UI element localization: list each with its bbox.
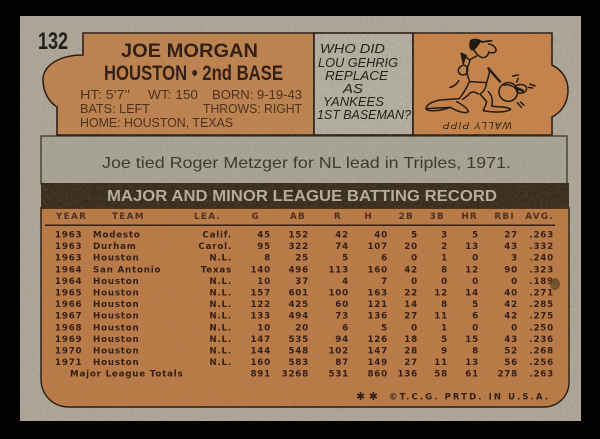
table row 1964 Houston: Houston — [93, 277, 140, 287]
table row 1965 Houston: 163 — [367, 288, 388, 298]
table row major league totals: 3268 — [282, 370, 309, 380]
table row 1963 Houston: 8 — [264, 254, 271, 264]
table row 1970 Houston: 28 — [404, 346, 418, 356]
table row 1966 Houston: 42 — [504, 300, 518, 310]
table header: RBI — [494, 212, 515, 222]
table row 1969 Houston: .236 — [529, 335, 554, 345]
table row 1966 Houston: 60 — [335, 300, 349, 310]
table row 1971 Houston: 11 — [434, 358, 448, 368]
table row 1966 Houston: 5 — [472, 300, 479, 310]
table row 1963 Modesto: 42 — [335, 230, 349, 240]
table header: 2B — [399, 212, 414, 222]
table row 1963 Durham: 107 — [367, 242, 388, 252]
table row 1967 Houston: 1967 — [55, 312, 82, 322]
table row 1963 Modesto: 3 — [441, 230, 448, 240]
table row 1970 Houston: 8 — [472, 346, 479, 356]
table row 1971 Houston: 583 — [288, 358, 309, 368]
table row 1968 Houston: 0 — [472, 323, 479, 333]
table row 1969 Houston: Houston — [93, 335, 140, 345]
table row 1970 Houston: 52 — [504, 346, 518, 356]
table row 1969 Houston: 18 — [404, 335, 418, 345]
stain mark — [550, 278, 560, 290]
table row 1971 Houston: 160 — [250, 358, 271, 368]
bio lines: HT: 5'7'' — [80, 87, 130, 102]
table row 1963 Durham: 1963 — [55, 242, 82, 252]
panel: trivia question: 1ST BASEMAN? — [317, 108, 411, 122]
table row 1971 Houston: N.L. — [209, 358, 232, 368]
table row 1971 Houston: 1971 — [55, 358, 82, 368]
panel: trivia question — [314, 33, 413, 135]
table row 1963 Houston: 3 — [511, 254, 518, 264]
table row 1963 Durham: 43 — [504, 242, 518, 252]
table row 1971 Houston: 87 — [335, 358, 349, 368]
table row 1963 Houston — [55, 254, 554, 264]
table row 1970 Houston: .268 — [529, 346, 554, 356]
table row 1964 Houston: 0 — [511, 277, 518, 287]
table row 1963 Modesto: 45 — [257, 230, 271, 240]
panel: cartoon answer — [413, 33, 568, 135]
table header: 3B — [430, 212, 445, 222]
table row 1964 Houston: .189 — [529, 277, 554, 287]
table row 1963 Durham: Carol. — [198, 242, 232, 252]
table row 1964 Houston: 0 — [472, 277, 479, 287]
table row 1971 Houston: 27 — [404, 358, 418, 368]
table row major league totals: .263 — [529, 370, 554, 380]
table row 1963 Houston: 6 — [381, 254, 388, 264]
table row major league totals: 891 — [250, 370, 271, 380]
table row 1964 San Antonio: 496 — [288, 265, 309, 275]
table row 1963 Durham: 2 — [441, 242, 448, 252]
card number: 132 — [38, 28, 68, 55]
table row 1964 San Antonio: 90 — [504, 265, 518, 275]
bio lines: BORN: 9-19-43 — [212, 87, 302, 102]
table row 1965 Houston: 1965 — [55, 288, 82, 298]
panel: batting record table — [41, 183, 569, 407]
table row 1969 Houston: 1969 — [55, 335, 82, 345]
table row 1963 Durham: Durham — [93, 242, 137, 252]
table row 1963 Modesto: 1963 — [55, 230, 82, 240]
table row 1965 Houston: .271 — [529, 288, 554, 298]
cartoon answer: upside-down caption: WALLY PIPP — [443, 119, 512, 130]
table row 1965 Houston: 100 — [328, 288, 349, 298]
table header: R — [334, 212, 342, 222]
table row 1963 Houston: 1 — [441, 254, 448, 264]
table header: H — [364, 212, 373, 222]
table row 1964 Houston: 10 — [257, 277, 271, 287]
table row 1971 Houston: .256 — [529, 358, 554, 368]
panel: trivia question: LOU GEHRIG — [318, 56, 398, 70]
table row major league totals: 531 — [328, 370, 349, 380]
table row 1966 Houston: 121 — [367, 300, 388, 310]
table row 1965 Houston: Houston — [93, 288, 140, 298]
table row 1963 Houston: 0 — [472, 254, 479, 264]
table row 1963 Modesto: 27 — [504, 230, 518, 240]
table row major league totals: 278 — [497, 370, 518, 380]
table row 1964 San Antonio: Texas — [201, 265, 232, 275]
table row 1970 Houston: 144 — [250, 346, 271, 356]
bio lines: WT: 150 — [148, 87, 198, 102]
table row 1969 Houston — [55, 335, 554, 345]
table row 1965 Houston: 22 — [404, 288, 418, 298]
table row 1968 Houston: 5 — [381, 323, 388, 333]
table row 1971 Houston: Houston — [93, 358, 140, 368]
table row 1965 Houston: 601 — [288, 288, 309, 298]
table row 1967 Houston: 27 — [404, 312, 418, 322]
table header: AVG. — [525, 212, 554, 222]
bio lines — [80, 87, 302, 130]
table row 1968 Houston: 1968 — [55, 323, 82, 333]
table row 1970 Houston: N.L. — [209, 346, 232, 356]
table row 1968 Houston: Houston — [93, 323, 140, 333]
table row 1966 Houston: 1966 — [55, 300, 82, 310]
table row 1964 Houston — [55, 277, 554, 287]
table row 1963 Houston: 25 — [295, 254, 309, 264]
bio lines: THROWS: RIGHT — [203, 101, 302, 116]
table row 1969 Houston: 535 — [288, 335, 309, 345]
panel: trivia question: REPLACE — [325, 69, 389, 83]
table row 1963 Modesto: .263 — [529, 230, 554, 240]
table row 1970 Houston — [55, 346, 554, 356]
table row 1964 San Antonio: 140 — [250, 265, 271, 275]
table row 1966 Houston: 8 — [441, 300, 448, 310]
table header: LEA. — [194, 212, 221, 222]
panel: trivia question: WHO DID — [320, 42, 385, 56]
table row 1966 Houston — [55, 300, 554, 310]
table row 1963 Durham: 322 — [288, 242, 309, 252]
table row 1963 Houston: N.L. — [209, 254, 232, 264]
table row 1963 Modesto: 40 — [374, 230, 388, 240]
table row 1970 Houston: 1970 — [55, 346, 82, 356]
table row 1969 Houston: 5 — [441, 335, 448, 345]
table header — [55, 212, 554, 222]
table row 1969 Houston: 15 — [465, 335, 479, 345]
table row 1963 Modesto: Calif. — [202, 230, 232, 240]
table row 1969 Houston: 147 — [250, 335, 271, 345]
table row 1967 Houston: 42 — [504, 312, 518, 322]
table row 1969 Houston: 94 — [335, 335, 349, 345]
team and position: HOUSTON • 2nd BASE — [104, 62, 283, 85]
panel: career highlight — [41, 136, 567, 184]
table row 1966 Houston: 425 — [288, 300, 309, 310]
table row 1963 Houston: Houston — [93, 254, 140, 264]
panel: player name and bio — [38, 28, 314, 135]
table row 1970 Houston: 548 — [288, 346, 309, 356]
table row 1967 Houston: 11 — [434, 312, 448, 322]
table row 1964 Houston: 37 — [295, 277, 309, 287]
table row 1968 Houston: .250 — [529, 323, 554, 333]
table row 1963 Durham — [55, 242, 554, 252]
table row 1971 Houston — [55, 358, 554, 368]
table row 1968 Houston — [55, 323, 554, 333]
table row 1967 Houston: 6 — [472, 312, 479, 322]
table row major league totals: 860 — [367, 370, 388, 380]
table row 1970 Houston: 102 — [328, 346, 349, 356]
table row 1968 Houston: N.L. — [209, 323, 232, 333]
table row 1970 Houston: 147 — [367, 346, 388, 356]
table row 1970 Houston: 9 — [441, 346, 448, 356]
table row 1965 Houston: 157 — [250, 288, 271, 298]
table row 1964 San Antonio: 113 — [328, 265, 349, 275]
bio lines: BATS: LEFT — [80, 101, 150, 116]
table row 1965 Houston: 12 — [434, 288, 448, 298]
highlight text: Joe tied Roger Metzger for NL lead in Triples, 1971. — [102, 155, 511, 172]
table row 1971 Houston: 149 — [367, 358, 388, 368]
table header: HR — [461, 212, 478, 222]
table row 1963 Modesto: 5 — [472, 230, 479, 240]
table row 1968 Houston: 10 — [257, 323, 271, 333]
table row 1963 Houston: 0 — [411, 254, 418, 264]
table row 1963 Durham: 20 — [404, 242, 418, 252]
table row 1964 Houston: 7 — [381, 277, 388, 287]
table row 1967 Houston: 136 — [367, 312, 388, 322]
table row 1969 Houston: 43 — [504, 335, 518, 345]
table row 1968 Houston: 1 — [441, 323, 448, 333]
table row 1968 Houston: 20 — [295, 323, 309, 333]
table row 1969 Houston: N.L. — [209, 335, 232, 345]
table row major league totals: 61 — [465, 370, 479, 380]
table row 1964 Houston: 1964 — [55, 277, 82, 287]
copyright line — [356, 390, 548, 403]
table row 1965 Houston: 40 — [504, 288, 518, 298]
copyright line: ✱✱ — [356, 390, 378, 403]
table row 1967 Houston: 133 — [250, 312, 271, 322]
table row 1963 Modesto: 5 — [411, 230, 418, 240]
table row 1968 Houston: 0 — [411, 323, 418, 333]
section heading band: MAJOR AND MINOR LEAGUE BATTING RECORD — [107, 188, 497, 205]
table row 1964 Houston: 0 — [441, 277, 448, 287]
table row 1963 Durham: .332 — [529, 242, 554, 252]
table row 1967 Houston: 73 — [335, 312, 349, 322]
table row 1964 Houston: 4 — [342, 277, 349, 287]
table row 1963 Durham: 95 — [257, 242, 271, 252]
table row 1963 Modesto: Modesto — [93, 230, 141, 240]
table header: G — [251, 212, 260, 222]
copyright line: ©T.C.G. PRTD. IN U.S.A. — [389, 392, 548, 402]
table row 1971 Houston: 13 — [465, 358, 479, 368]
table row 1964 Houston: 0 — [411, 277, 418, 287]
table row 1964 San Antonio: 1964 — [55, 265, 82, 275]
icon: cartoon ball player — [426, 40, 535, 113]
table header: AB — [290, 212, 306, 222]
table header: TEAM — [112, 212, 145, 222]
section heading band — [41, 183, 569, 208]
table row 1968 Houston: 0 — [511, 323, 518, 333]
table row 1963 Houston: 1963 — [55, 254, 82, 264]
table row 1970 Houston: Houston — [93, 346, 140, 356]
table row 1969 Houston: 126 — [367, 335, 388, 345]
table row 1963 Durham: 13 — [465, 242, 479, 252]
table header: YEAR — [55, 212, 87, 222]
table row 1966 Houston: 14 — [404, 300, 418, 310]
table row 1965 Houston — [55, 288, 554, 298]
table row 1966 Houston: Houston — [93, 300, 140, 310]
table row major league totals: 136 — [397, 370, 418, 380]
table row 1967 Houston: .275 — [529, 312, 554, 322]
table row 1965 Houston: 14 — [465, 288, 479, 298]
table row 1964 San Antonio — [55, 265, 554, 275]
table row 1963 Modesto: 152 — [288, 230, 309, 240]
table row 1967 Houston: Houston — [93, 312, 140, 322]
table row major league totals: Major League Totals — [70, 370, 183, 380]
panel: trivia question: AS — [342, 82, 364, 96]
table row 1964 San Antonio: 42 — [404, 265, 418, 275]
table row 1966 Houston: 122 — [250, 300, 271, 310]
table row major league totals: 58 — [434, 370, 448, 380]
table row major league totals — [70, 370, 554, 380]
table row 1964 Houston: N.L. — [209, 277, 232, 287]
table row 1965 Houston: N.L. — [209, 288, 232, 298]
panel: trivia question: YANKEES — [323, 95, 385, 109]
table row 1964 San Antonio: 160 — [367, 265, 388, 275]
table row 1968 Houston: 6 — [342, 323, 349, 333]
table row 1964 San Antonio: San Antonio — [93, 265, 161, 275]
table row 1963 Durham: 74 — [335, 242, 349, 252]
table row 1966 Houston: N.L. — [209, 300, 232, 310]
table row 1967 Houston — [55, 312, 554, 322]
table row 1964 San Antonio: .323 — [529, 265, 554, 275]
table row 1967 Houston: N.L. — [209, 312, 232, 322]
table row 1963 Houston: 5 — [342, 254, 349, 264]
table row 1967 Houston: 494 — [288, 312, 309, 322]
table row 1963 Houston: .240 — [529, 254, 554, 264]
bio lines: HOME: HOUSTON, TEXAS — [80, 115, 233, 130]
table row 1964 San Antonio: 12 — [465, 265, 479, 275]
player name: JOE MORGAN — [121, 40, 258, 62]
table row 1963 Modesto — [55, 230, 554, 240]
table row 1966 Houston: .285 — [529, 300, 554, 310]
table row 1971 Houston: 56 — [504, 358, 518, 368]
table row 1964 San Antonio: 8 — [441, 265, 448, 275]
